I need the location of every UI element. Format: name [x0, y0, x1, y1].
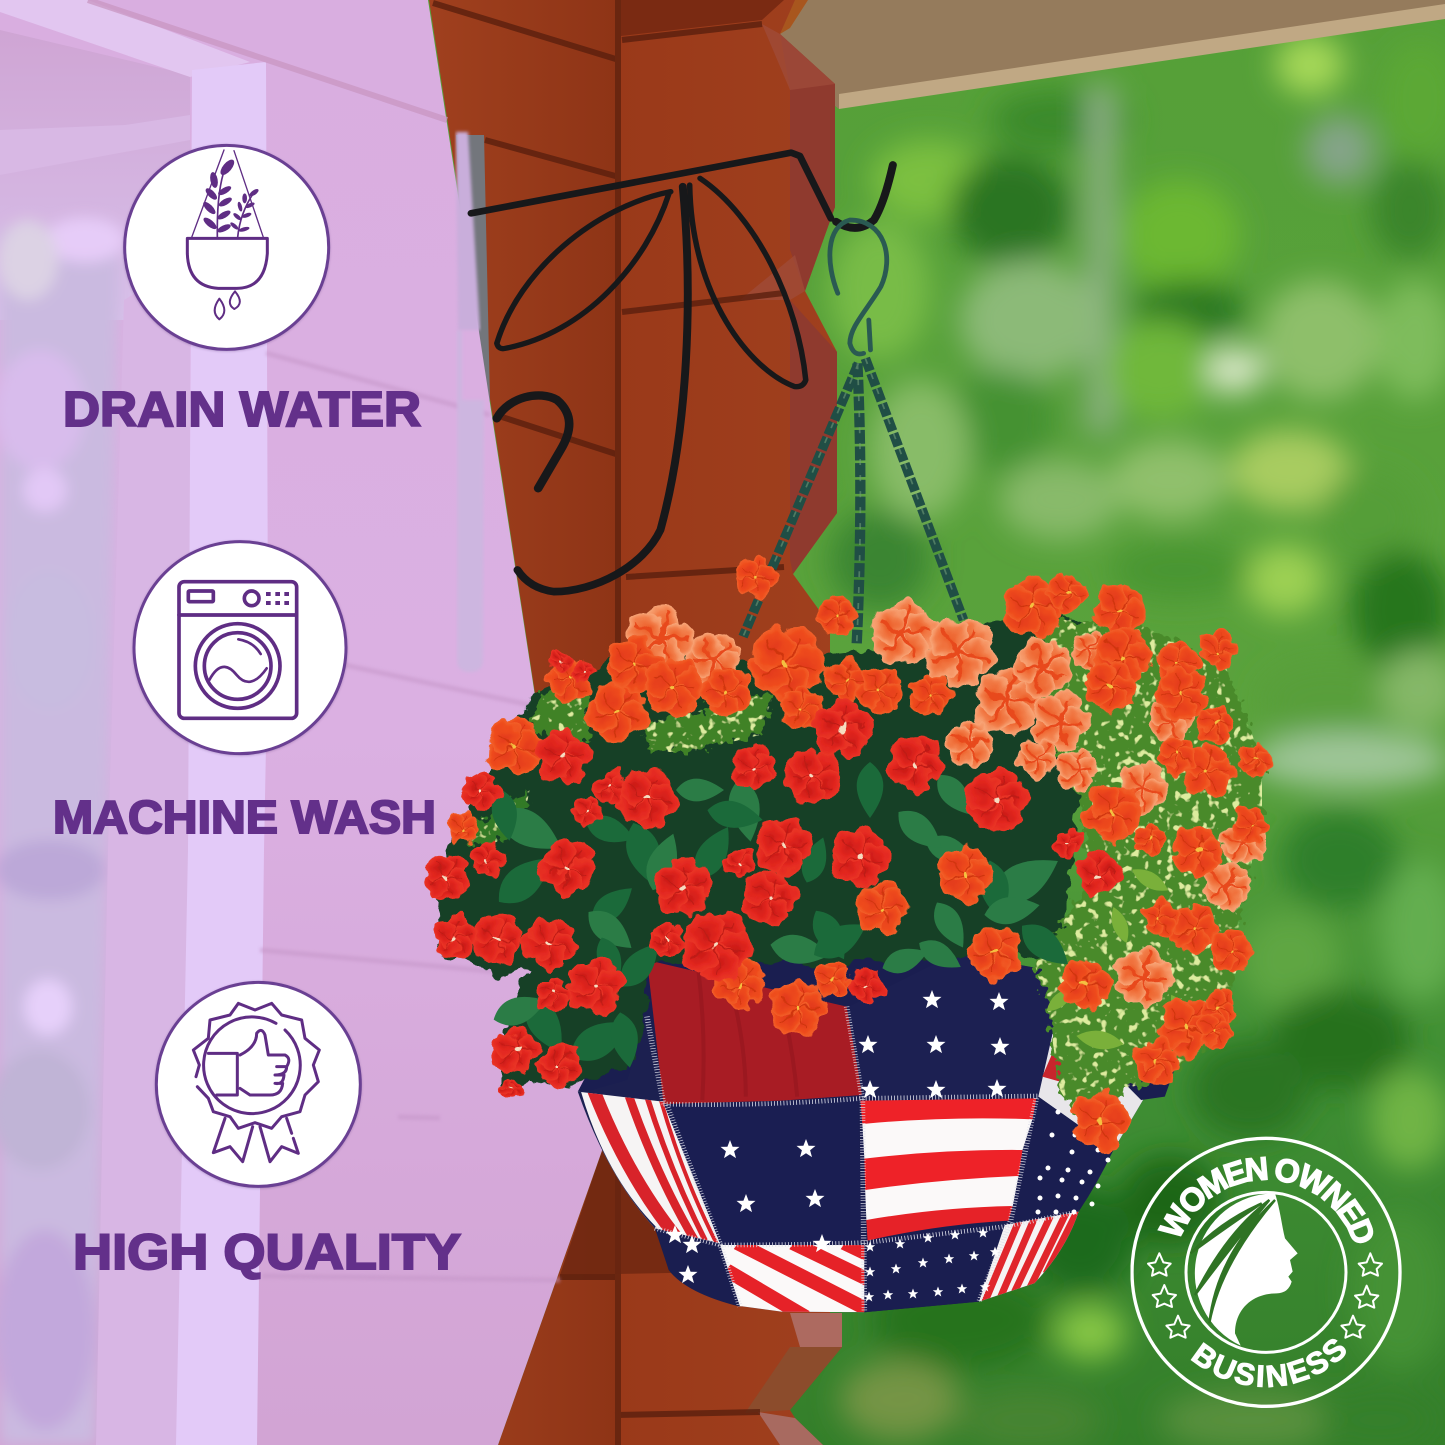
navy dotted bottom patch — [864, 1227, 1005, 1312]
navy star patch — [849, 953, 1054, 1098]
leaves — [488, 762, 1195, 1071]
heading: drain water: DRAIN WATER — [63, 383, 421, 437]
bottom left navy patch — [657, 1229, 740, 1307]
wooden post — [429, 0, 842, 1445]
badge text bottom: BUSINESS — [1190, 1338, 1346, 1388]
badge stars — [1148, 1253, 1382, 1338]
room interior — [0, 30, 190, 320]
bottom right stripes — [979, 1212, 1078, 1302]
post end faces — [780, 34, 837, 574]
heading: high quality: HIGH QUALITY — [73, 1224, 461, 1280]
navy center patch — [667, 1100, 864, 1244]
s hook — [830, 220, 887, 354]
left striped patch — [576, 1090, 726, 1247]
light column — [176, 62, 268, 1445]
peach flowers — [612, 593, 1270, 1021]
iron wall bracket — [471, 153, 893, 592]
trim band — [0, 0, 250, 77]
patchwork flag basket — [576, 953, 1177, 1317]
badge text top: WOMEN OWNED — [1157, 1156, 1374, 1244]
icon: hanging planter with drops — [125, 145, 329, 349]
feature: drain water — [63, 145, 421, 437]
light foliage on right — [1035, 620, 1262, 1125]
heading: machine wash: MACHINE WASH — [53, 791, 436, 843]
left blurred garden — [0, 218, 125, 1445]
feature: high quality — [73, 982, 461, 1280]
red patch — [647, 960, 862, 1104]
striped center patch — [860, 1098, 1036, 1125]
small white stars — [864, 1110, 1110, 1301]
orange flowers — [440, 547, 1281, 1163]
panel: purple overlay — [0, 0, 604, 1445]
wall bracket plate — [456, 135, 490, 400]
feature: machine wash — [53, 542, 436, 843]
small stars patch — [1011, 1097, 1113, 1221]
navy left patch — [586, 1017, 664, 1103]
basket base — [578, 953, 1149, 1312]
woman profile — [1191, 1193, 1298, 1346]
chains — [743, 358, 963, 643]
bracket and chain — [471, 153, 963, 643]
icon: quality rosette with thumbs up — [156, 982, 360, 1186]
red flowers — [410, 645, 1126, 1104]
post seams — [433, 3, 784, 1415]
right edge patch — [1038, 970, 1149, 1150]
diagonal striped patch — [720, 1245, 864, 1312]
white stars — [666, 990, 1010, 1283]
board lines — [88, 0, 447, 120]
porch roof beam — [775, 0, 1445, 109]
icon: washing machine — [134, 542, 346, 754]
bracket plate seen through overlay — [457, 330, 484, 672]
pink strip — [96, 260, 190, 1445]
badge: women owned business — [1130, 1136, 1402, 1408]
stitched seams — [647, 1007, 1079, 1312]
dark foliage base — [435, 610, 1100, 1085]
flower mass — [410, 547, 1281, 1163]
